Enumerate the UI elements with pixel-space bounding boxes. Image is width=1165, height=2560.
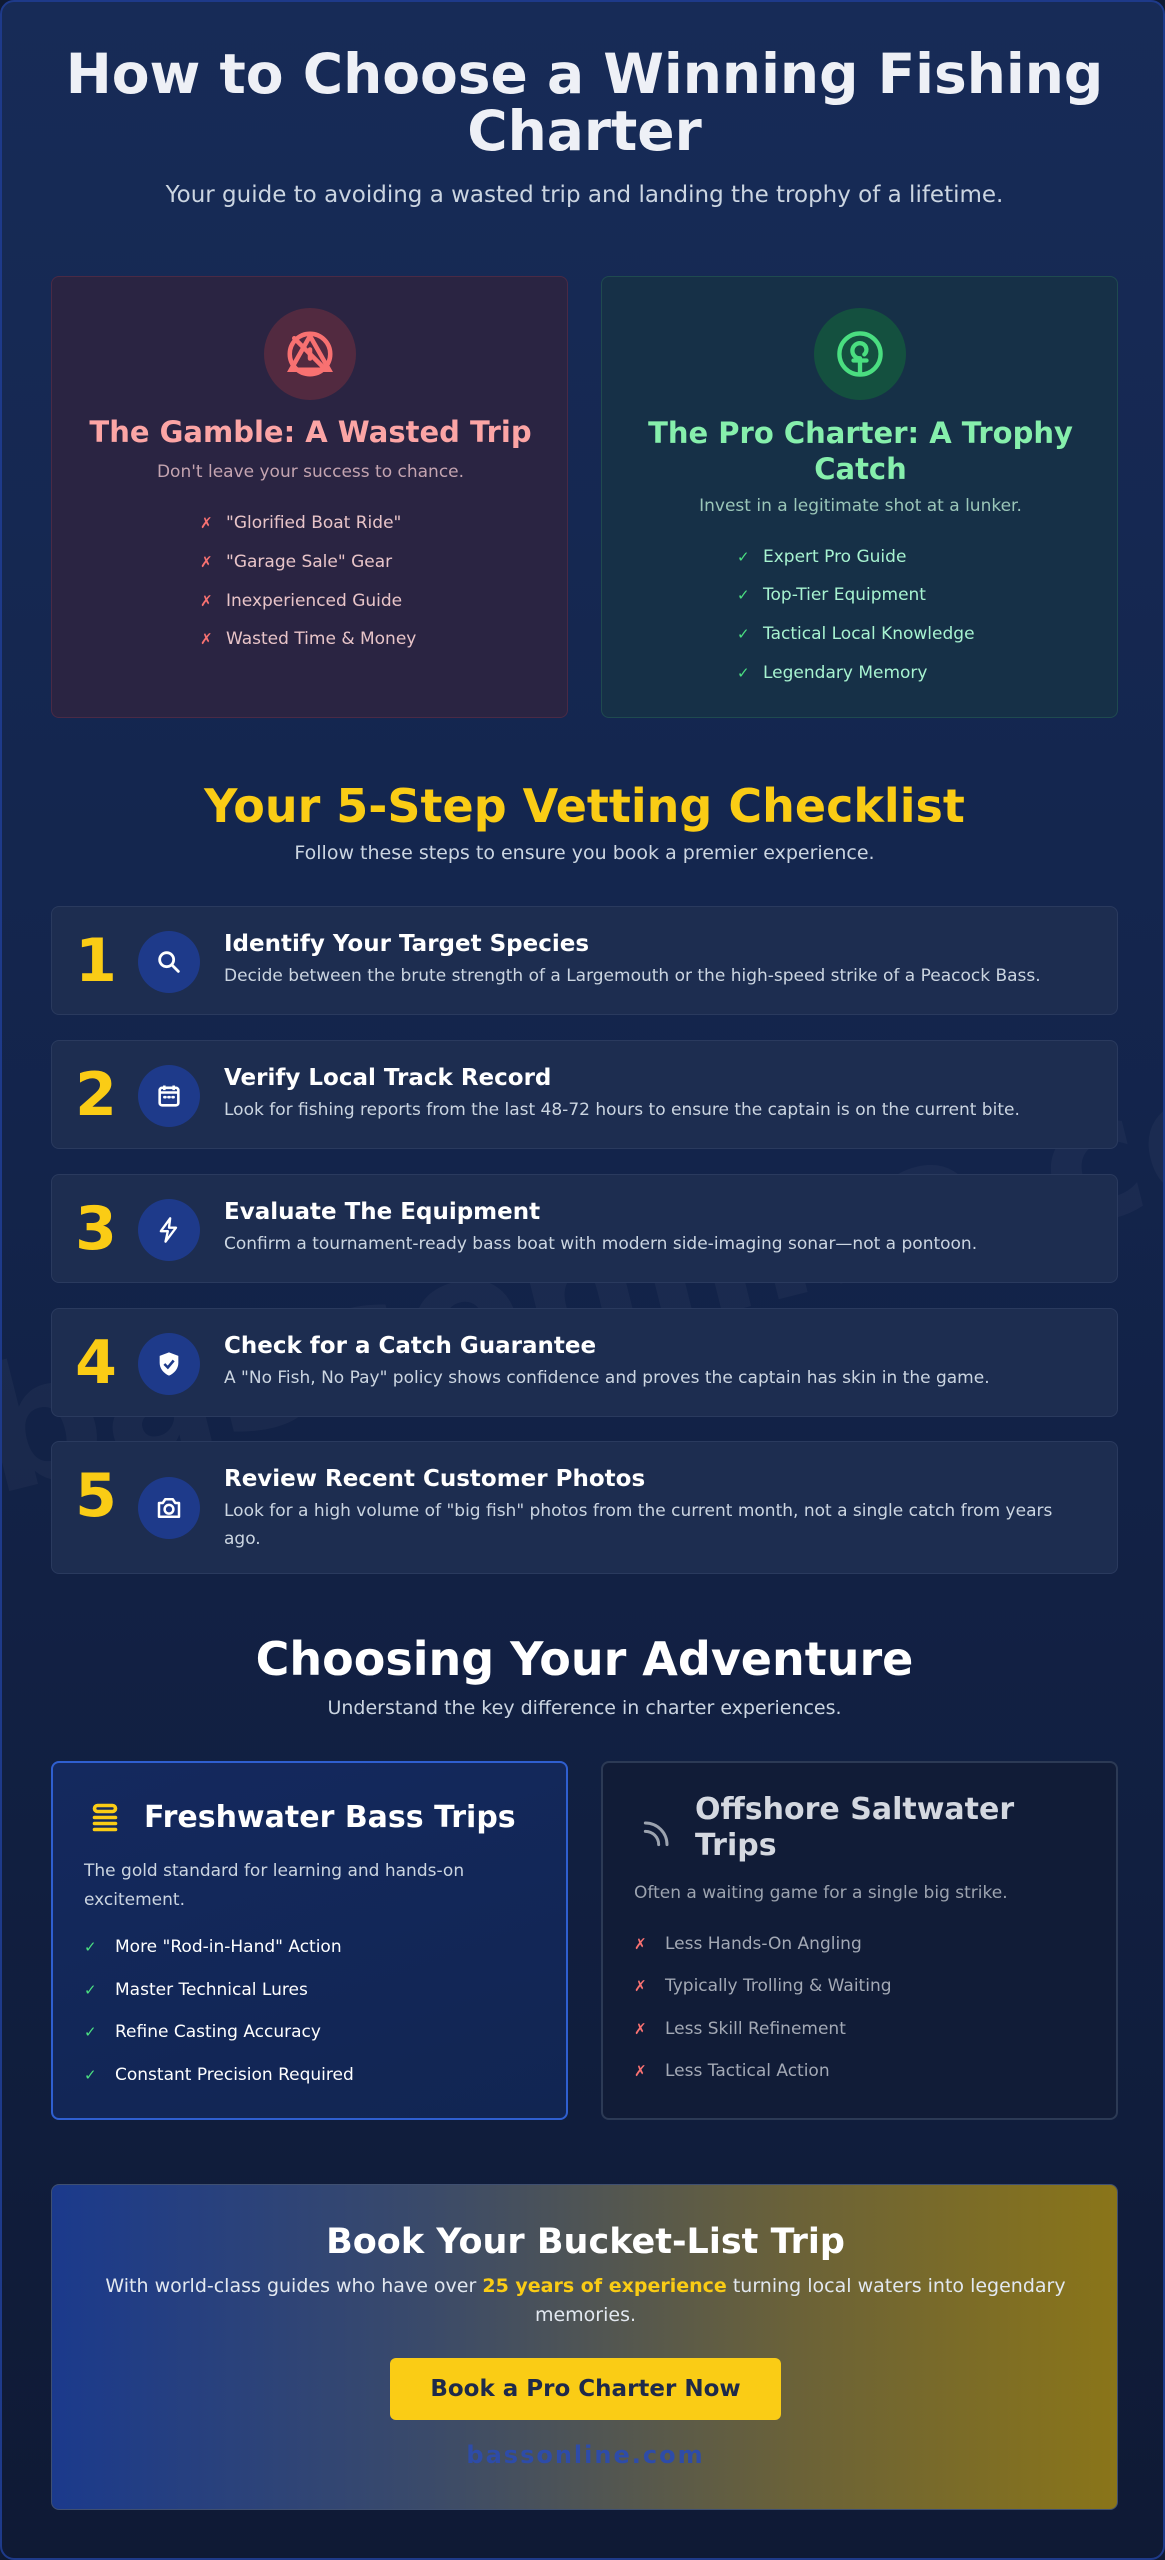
panel: offshore saltwater trips xyxy=(601,1761,1118,2120)
list: ✓ xyxy=(737,548,750,566)
list: More "Rod-in-Hand" Action xyxy=(115,1937,342,1957)
list: Less Hands-On Angling xyxy=(665,1934,862,1954)
title xyxy=(66,42,1103,163)
step 5: Look for a high volume of "big fish" photos from the current month, not a single catch from years ago. xyxy=(224,1501,1052,1549)
step 4: Check for a Catch Guarantee xyxy=(224,1333,596,1359)
icon: camera xyxy=(138,1477,200,1539)
icon: bolt xyxy=(138,1199,200,1261)
list: Inexperienced Guide xyxy=(226,591,402,611)
list: ✗ xyxy=(200,553,213,571)
list: ✓ xyxy=(84,1938,97,1956)
icon: tree xyxy=(814,308,906,400)
heading: Trips xyxy=(695,1828,777,1863)
heading: Offshore Saltwater xyxy=(695,1792,1014,1827)
icon: warning off xyxy=(264,308,356,400)
list: Expert Pro Guide xyxy=(763,547,906,567)
cta heading: Book Your Bucket-List Trip xyxy=(326,2222,845,2262)
subtext: Invest in a legitimate shot at a lunker. xyxy=(699,496,1022,516)
panel: freshwater bass trips xyxy=(51,1761,568,2120)
step 5: Review Recent Customer Photos xyxy=(224,1466,645,1492)
subtitle: Your guide to avoiding a wasted trip and landing the trophy of a lifetime. xyxy=(166,182,1003,208)
heading xyxy=(695,1792,1014,1863)
step 1: Identify Your Target Species xyxy=(224,931,589,957)
icon: stack xyxy=(92,1804,118,1832)
cta text: With world-class guides who have over 25 years of experience turning local waters into legendary memories. xyxy=(105,2275,1066,2326)
list xyxy=(200,513,416,649)
list: Master Technical Lures xyxy=(115,1980,308,2000)
heading: checklist: Your 5-Step Vetting Checklist xyxy=(204,779,965,833)
list: ✓ xyxy=(84,1981,97,1999)
list: Wasted Time & Money xyxy=(226,629,416,649)
heading: Freshwater Bass Trips xyxy=(144,1800,516,1835)
list xyxy=(737,547,975,683)
title: Charter xyxy=(467,99,702,163)
list: Tactical Local Knowledge xyxy=(763,624,975,644)
step 2: Verify Local Track Record xyxy=(224,1065,551,1091)
list: ✗ xyxy=(200,630,213,648)
list: ✓ xyxy=(737,664,750,682)
step 4: 4 xyxy=(75,1328,117,1398)
list: ✗ xyxy=(634,2062,647,2080)
subheading: adventure: Understand the key difference in charter experiences. xyxy=(327,1697,842,1719)
step 3: Evaluate The Equipment xyxy=(224,1199,540,1225)
title: How to Choose a Winning Fishing xyxy=(66,42,1103,106)
list: ✗ xyxy=(634,1935,647,1953)
list: ✗ xyxy=(200,592,213,610)
icon: calendar xyxy=(138,1065,200,1127)
description: Often a waiting game for a single big strike. xyxy=(634,1883,1008,1903)
step 4: A "No Fish, No Pay" policy shows confidence and proves the captain has skin in the game. xyxy=(224,1368,990,1388)
list: ✓ xyxy=(737,586,750,604)
subtext: Don't leave your success to chance. xyxy=(157,462,464,482)
list: ✗ xyxy=(200,514,213,532)
panel: the gamble xyxy=(51,276,568,718)
list: Typically Trolling & Waiting xyxy=(665,1976,892,1996)
list: Less Skill Refinement xyxy=(665,2019,846,2039)
list xyxy=(84,1937,354,2085)
step 4 xyxy=(51,1308,1118,1417)
list: Legendary Memory xyxy=(763,663,927,683)
list: ✗ xyxy=(634,1977,647,1995)
subheading: checklist: Follow these steps to ensure you book a premier experience. xyxy=(294,842,875,864)
heading xyxy=(648,416,1073,486)
icon: shield xyxy=(138,1333,200,1395)
list: ✗ xyxy=(634,2020,647,2038)
list: "Garage Sale" Gear xyxy=(226,552,392,572)
list: ✓ xyxy=(84,2066,97,2084)
heading: Catch xyxy=(814,452,907,486)
step 3 xyxy=(51,1174,1118,1283)
step 5: 5 xyxy=(75,1461,117,1531)
brand: bassonline.com xyxy=(466,2441,705,2469)
list: ✓ xyxy=(84,2023,97,2041)
step 2 xyxy=(51,1040,1118,1149)
step 2: 2 xyxy=(75,1060,117,1130)
heading: The Gamble: A Wasted Trip xyxy=(89,415,532,449)
step 3: Confirm a tournament-ready bass boat with modern side-imaging sonar—not a pontoon. xyxy=(224,1234,977,1254)
step 1 xyxy=(51,906,1118,1015)
step 2: Look for fishing reports from the last 48-72 hours to ensure the captain is on the current bite. xyxy=(224,1100,1020,1120)
heading: choosing your adventure: Choosing Your Adventure xyxy=(256,1632,913,1686)
icon: search xyxy=(138,931,200,993)
list: Constant Precision Required xyxy=(115,2065,354,2085)
step 1: Decide between the brute strength of a Largemouth or the high-speed strike of a Peacock Bass. xyxy=(224,966,1041,986)
list: Less Tactical Action xyxy=(665,2061,830,2081)
step 1: 1 xyxy=(75,926,117,996)
heading: The Pro Charter: A Trophy xyxy=(648,416,1073,450)
list: Refine Casting Accuracy xyxy=(115,2022,321,2042)
panel: the pro charter xyxy=(601,276,1118,718)
callout: book your trip xyxy=(51,2184,1118,2510)
list: ✓ xyxy=(737,625,750,643)
list xyxy=(634,1934,892,2081)
step 5 xyxy=(51,1441,1118,1574)
icon: signal xyxy=(644,1822,668,1846)
button xyxy=(390,2358,781,2420)
description: The gold standard for learning and hands-on excitement. xyxy=(84,1861,464,1910)
list: Top-Tier Equipment xyxy=(763,585,926,605)
list: "Glorified Boat Ride" xyxy=(226,513,401,533)
button: Book a Pro Charter Now xyxy=(430,2376,741,2402)
step 3: 3 xyxy=(75,1194,117,1264)
